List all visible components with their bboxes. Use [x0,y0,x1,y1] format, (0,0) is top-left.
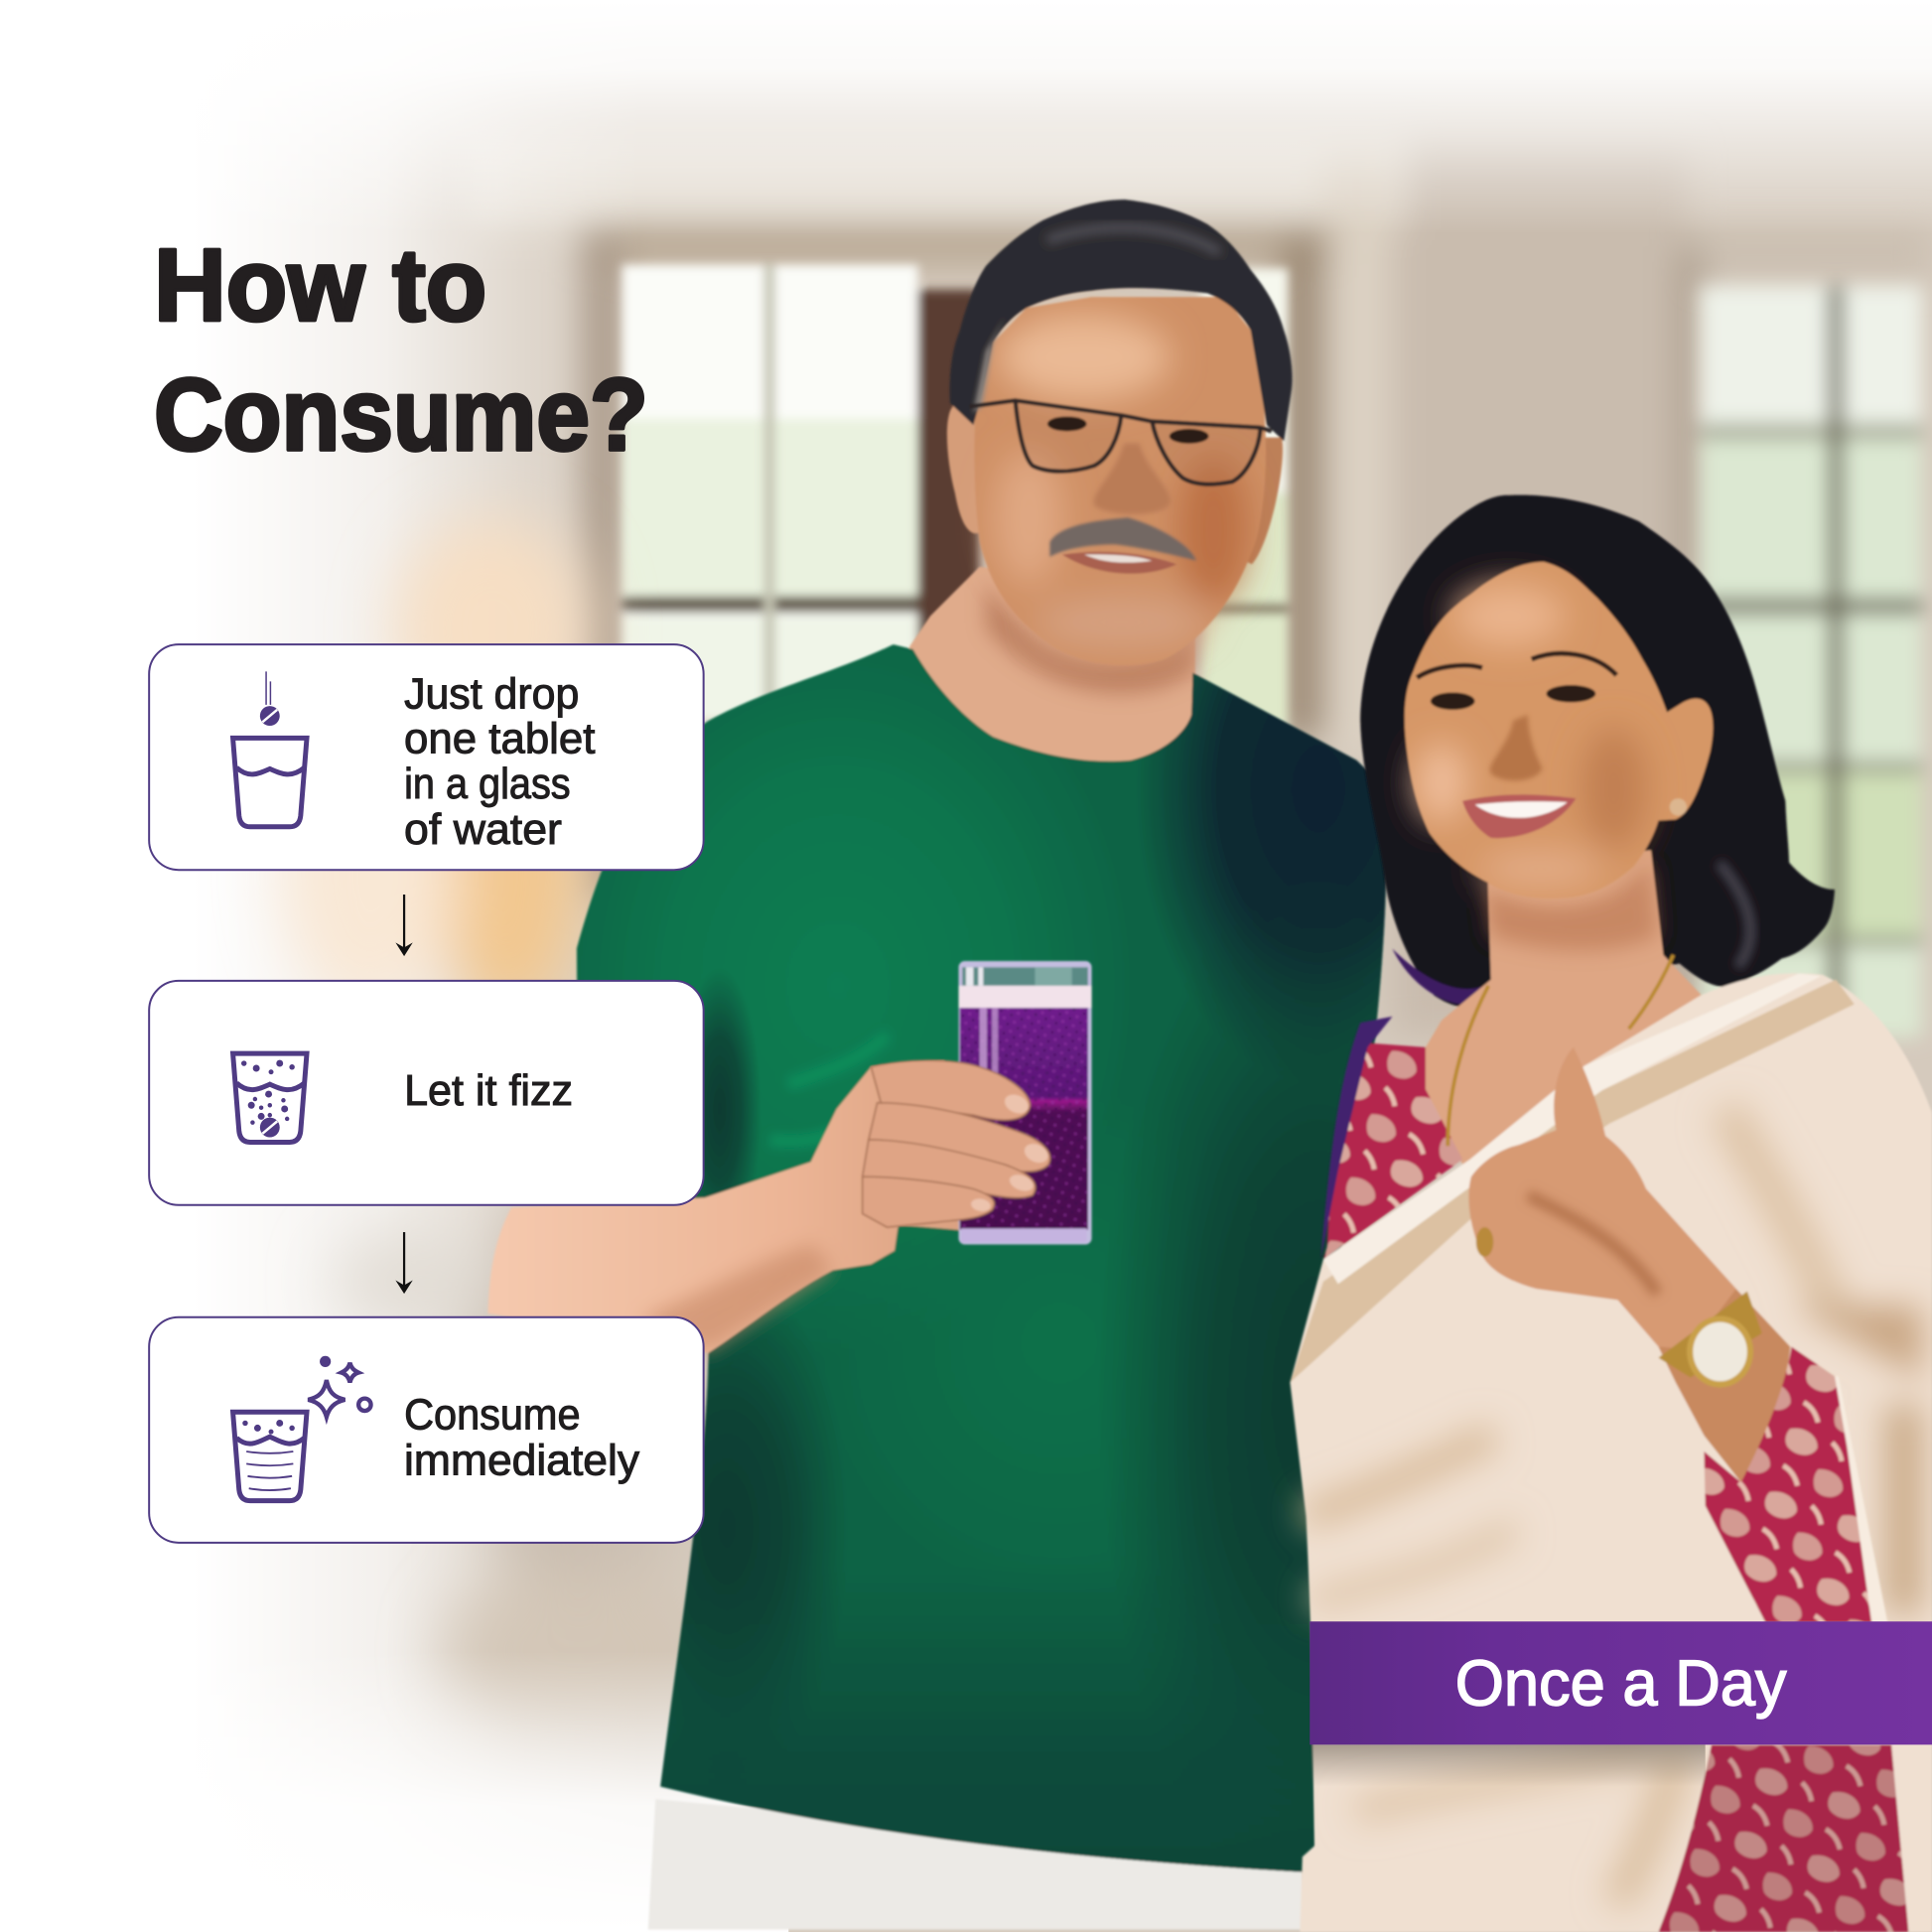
woman smile [1462,794,1576,838]
man right ear [1232,438,1283,564]
step 1 text [404,671,595,854]
man neck [909,567,1195,764]
woman face [1405,562,1713,898]
man t-shirt [575,643,1388,1873]
man left ear [947,404,986,533]
step 3 text: immediately [404,1438,639,1485]
man glasses [970,400,1272,484]
woman nose [1490,715,1543,780]
banner: once a day [1310,1621,1932,1744]
step card 3 [149,1317,704,1543]
arrow: step 2 to 3 [395,1232,413,1294]
step 3 text: Consume [404,1392,581,1440]
man forearm [487,1061,986,1353]
woman blouse [1323,1042,1462,1259]
icon: tablet dropping in water glass [233,671,307,827]
shadow under banner [1311,1744,1706,1787]
person: woman [1290,495,1932,1932]
step 3 text [404,1392,639,1485]
fingernails [970,1091,1051,1213]
man head [947,200,1293,665]
title [154,228,648,472]
step card 1 [149,644,704,870]
man face [974,297,1266,665]
step card 2 [149,981,704,1205]
step 1 text: one tablet [404,715,595,762]
icon: glass with sparkles [233,1356,371,1501]
man hair [950,200,1293,441]
woman neck and chest [1426,850,1707,1165]
window panes right [1701,286,1922,1037]
saree border bands [1290,980,1855,1382]
step 1 text: Just drop [404,671,579,719]
title: Consume? [154,357,648,472]
man eyes [1047,416,1208,444]
woman earring [1670,798,1687,816]
icon: fizzing tablet in glass [233,1053,307,1142]
woman forearm [1639,1189,1790,1482]
person: man [487,566,1388,1930]
arrow: step 1 to 2 [395,895,413,956]
man pants [648,1799,1309,1930]
warm glow left [283,517,715,1737]
woman thumbs-up hand [1468,1047,1736,1349]
step 2 text: Let it fizz [404,1067,573,1115]
glass of purple drink [863,961,1092,1244]
step 1 text: in a glass [404,760,571,808]
banner: once a day: Once a Day [1455,1648,1787,1720]
man moustache and mouth [1049,517,1196,561]
window panes left [622,265,1288,731]
woman sleeve [1704,1346,1871,1622]
man fingers over glass [863,1060,1050,1227]
woman skirt [1658,1744,1908,1932]
man nose [1094,444,1171,514]
woman watch [1658,1292,1762,1387]
woman eyes and brows [1431,685,1595,710]
woman saree [1290,973,1932,1932]
woman necklace [1448,955,1673,1146]
woman hair [1360,495,1835,1008]
step 1 text: of water [404,806,562,854]
title: How to [154,228,486,343]
